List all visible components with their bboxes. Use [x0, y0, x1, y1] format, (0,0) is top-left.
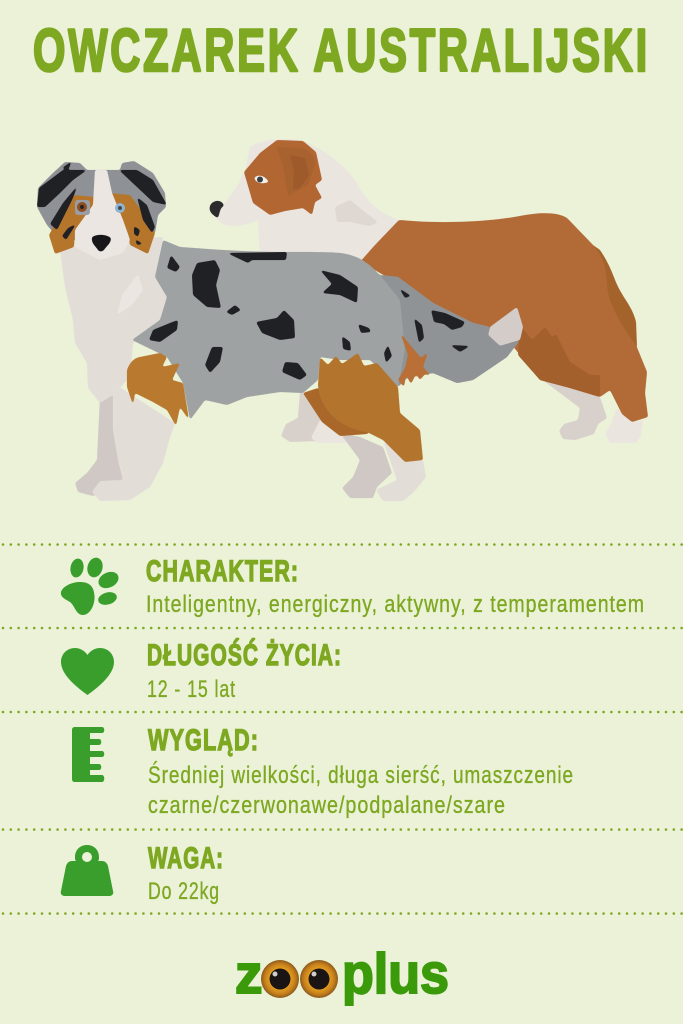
grey coat: [132, 240, 520, 420]
divider 5: [3, 912, 683, 915]
divider 4: [3, 828, 683, 831]
icon: paw: [61, 556, 121, 615]
nose: [210, 201, 224, 218]
head white: [213, 139, 300, 226]
divider 1: [3, 543, 683, 546]
appearance heading: WYGLĄD:: [148, 724, 259, 757]
black spots: [149, 252, 470, 380]
rust hind leg: [318, 353, 423, 462]
head grey base: [37, 161, 166, 240]
hind dark thigh: [303, 388, 370, 436]
lifespan text: 12 - 15 lat: [147, 676, 236, 703]
right rust patch: [108, 193, 155, 254]
appearance text: Średniej wielkości, długa sierść, umaszczenie: [148, 761, 574, 789]
head dark streaks: [37, 161, 167, 245]
rust body: [360, 213, 648, 422]
divider 2: [3, 627, 683, 629]
tail: [488, 307, 523, 346]
illustration: red merle back dog: [210, 139, 648, 443]
divider 3: [3, 711, 683, 713]
rust shoulder: [127, 353, 189, 426]
icon: heart: [61, 648, 114, 695]
rust head patch: [244, 140, 322, 215]
logo: zooplus: z: [235, 943, 262, 1005]
illustration: blue merle front dog: [37, 161, 523, 501]
lifespan heading: DŁUGOŚĆ ŻYCIA:: [147, 638, 342, 672]
blue eye: [115, 203, 125, 213]
appearance text: czarne/czerwonawe/podpalane/szare: [148, 792, 506, 819]
eye: [254, 176, 269, 183]
rear far leg: [340, 433, 392, 498]
weight text: Do 22kg: [148, 878, 220, 905]
icon: comb: [72, 727, 104, 782]
logo: zooplus: [235, 942, 449, 1006]
nose: [92, 235, 111, 252]
chest ruff: [60, 237, 167, 403]
far hind leg: [540, 378, 607, 440]
charakter heading: CHARAKTER:: [146, 555, 299, 588]
near front leg: [92, 383, 175, 501]
darker belly fur: [518, 325, 600, 397]
far front legs: [281, 392, 325, 442]
neck and chest: [258, 139, 399, 300]
rust fringe: [398, 332, 431, 387]
ear: [276, 147, 315, 196]
near hind paw: [605, 408, 643, 443]
rear near leg: [376, 440, 426, 501]
icon: weight: [61, 845, 113, 896]
appearance text: [148, 761, 574, 819]
weight heading: WAGA:: [148, 842, 224, 875]
far front leg: [75, 395, 126, 496]
hind grey shade: [380, 275, 520, 387]
white blaze: [75, 170, 130, 260]
left rust patch: [49, 195, 95, 254]
logo: zooplus: plus: [342, 942, 449, 1006]
brown eye: [75, 200, 90, 215]
chest highlight: [117, 274, 143, 315]
dark haunch: [590, 243, 637, 348]
